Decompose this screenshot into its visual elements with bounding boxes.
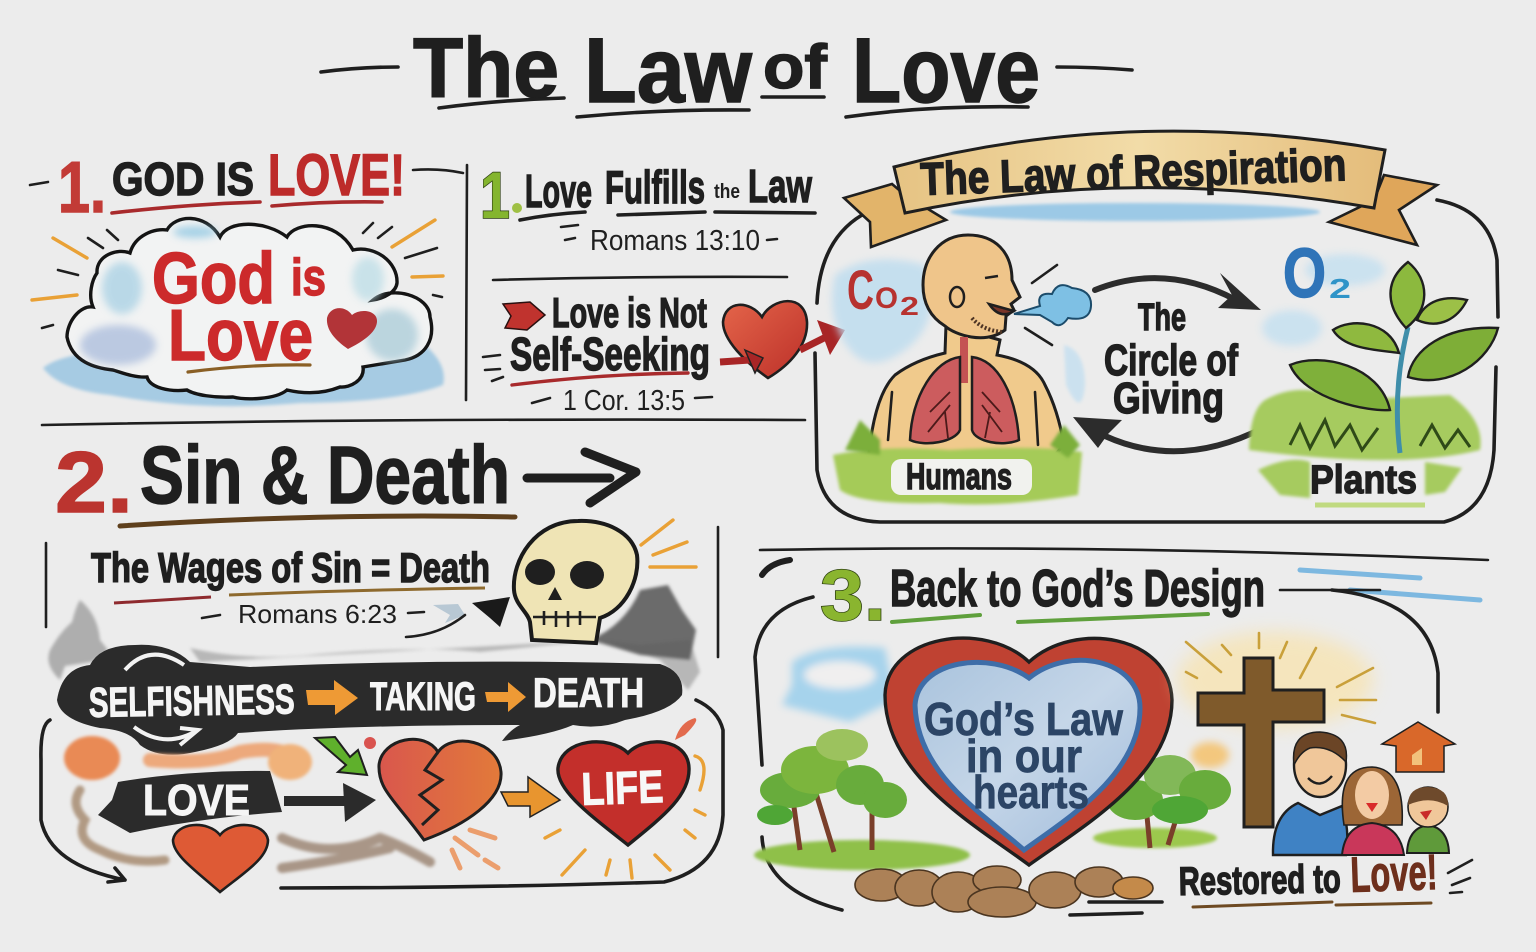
human figure with lungs [869, 235, 1064, 460]
text: Love is Not Self-Seeking: 1 Cor. 13:5 [563, 385, 685, 417]
CO2 label [832, 258, 932, 362]
panel: back to god's design [754, 590, 1472, 917]
section 1: God is Love heading: LOVE! [268, 143, 405, 208]
skull [406, 520, 696, 643]
section 2: Sin and Death heading: 2. [55, 435, 133, 531]
center label: circle of giving [1064, 297, 1238, 423]
divider lines [42, 165, 805, 425]
cloud: God is Love: God [152, 239, 275, 319]
panel: wages of sin: Romans 6:23 [238, 599, 397, 629]
arrow: to plants [1095, 273, 1261, 310]
heart and arrow [720, 301, 845, 378]
heading: Love Fulfills the Law: Fulfills [605, 161, 705, 213]
panel: wages of sin [46, 527, 718, 657]
caption: restored to love [1178, 844, 1472, 907]
cloud: God is Love: is [291, 249, 326, 307]
section 3 divider [760, 548, 1488, 560]
label: Plants: Plants [1310, 458, 1417, 502]
O2 label: 2 [1329, 273, 1351, 304]
ground and label: Humans: Humans [906, 456, 1012, 497]
cloud: God is Love [32, 218, 444, 406]
caption: restored to love: Restored to [1178, 857, 1341, 904]
sky clouds [782, 647, 1229, 768]
love banner [98, 771, 376, 833]
section 3 heading [820, 556, 1480, 636]
heart: in our [966, 730, 1082, 782]
heading: Love Fulfills the Law: 1 [480, 158, 510, 232]
CO2 label: C [847, 258, 874, 321]
heading: Love Fulfills the Law [480, 158, 815, 232]
arrow: sin and death [527, 452, 636, 503]
reference: Romans 13:10: Romans 13:10 [590, 225, 760, 257]
arrow: to humans [1073, 417, 1263, 451]
dark banner: selfishness to death: SELFISHNESS [88, 675, 295, 726]
title: Law [584, 20, 752, 122]
section 2: Sin and Death heading: Sin & Death [140, 430, 510, 521]
section 3 heading: 3. [820, 556, 886, 636]
lower frame [41, 700, 723, 888]
cloud: God is Love: Love [168, 296, 313, 376]
watercolor smears [64, 736, 430, 868]
section 3 heading: Back to God’s Design [890, 560, 1265, 618]
heading: Love Fulfills the Law: Love [525, 165, 592, 217]
broken heart [364, 737, 501, 868]
panel: wages of sin: The Wages of Sin = Death [91, 544, 490, 591]
title: The [413, 21, 559, 115]
heading: Love Fulfills the Law: the [714, 181, 740, 203]
heart [885, 638, 1172, 865]
divider 2 [493, 277, 787, 280]
orange heart [173, 825, 268, 892]
section 1: God is Love heading [30, 143, 463, 228]
house [1382, 722, 1455, 772]
dark banner: selfishness to death: DEATH [533, 669, 644, 716]
cross [1177, 632, 1376, 827]
panel: law of respiration [815, 131, 1498, 522]
heading: Love Fulfills the Law: Law [748, 160, 812, 212]
CO2 label: O [875, 282, 898, 315]
breath puff [1014, 265, 1091, 345]
center label: circle of giving: The [1138, 297, 1186, 339]
dark banner: selfishness to death: TAKING [370, 675, 476, 719]
title: of [763, 33, 827, 102]
text: Love is Not Self-Seeking: Self-Seeking [510, 328, 710, 380]
life heart: LIFE [581, 760, 664, 815]
heart: hearts [973, 766, 1089, 818]
trees [754, 729, 1231, 870]
CO2 label: 2 [900, 291, 919, 321]
smoke [48, 585, 700, 690]
life heart [545, 718, 705, 878]
title: Love [852, 20, 1040, 122]
ground and label: Humans [833, 420, 1082, 504]
banner: The Law of Respiration [920, 138, 1347, 205]
center label: circle of giving: Giving [1113, 374, 1224, 423]
text: Love is Not Self-Seeking [483, 289, 712, 417]
family [1273, 732, 1449, 855]
heart: God’s Law [924, 693, 1123, 745]
plant [1249, 262, 1498, 460]
green arrow [315, 737, 367, 775]
orange arrow [501, 777, 560, 817]
text: Love is Not Self-Seeking: Love is Not [552, 289, 707, 336]
center label: circle of giving: Circle of [1104, 336, 1238, 385]
section 1: God is Love heading: GOD IS [112, 153, 254, 205]
banner [844, 131, 1437, 247]
caption: restored to love: Love! [1349, 844, 1438, 903]
title [321, 20, 1132, 122]
love banner: LOVE [143, 776, 250, 825]
O2 label [1262, 234, 1385, 346]
section 2: Sin and Death heading [55, 430, 515, 531]
O2 label: O [1283, 234, 1326, 312]
label: Plants [1258, 458, 1462, 505]
dark banner: selfishness to death [57, 645, 682, 755]
section 1: God is Love heading: 1. [58, 148, 106, 228]
dirt mound [855, 866, 1153, 917]
